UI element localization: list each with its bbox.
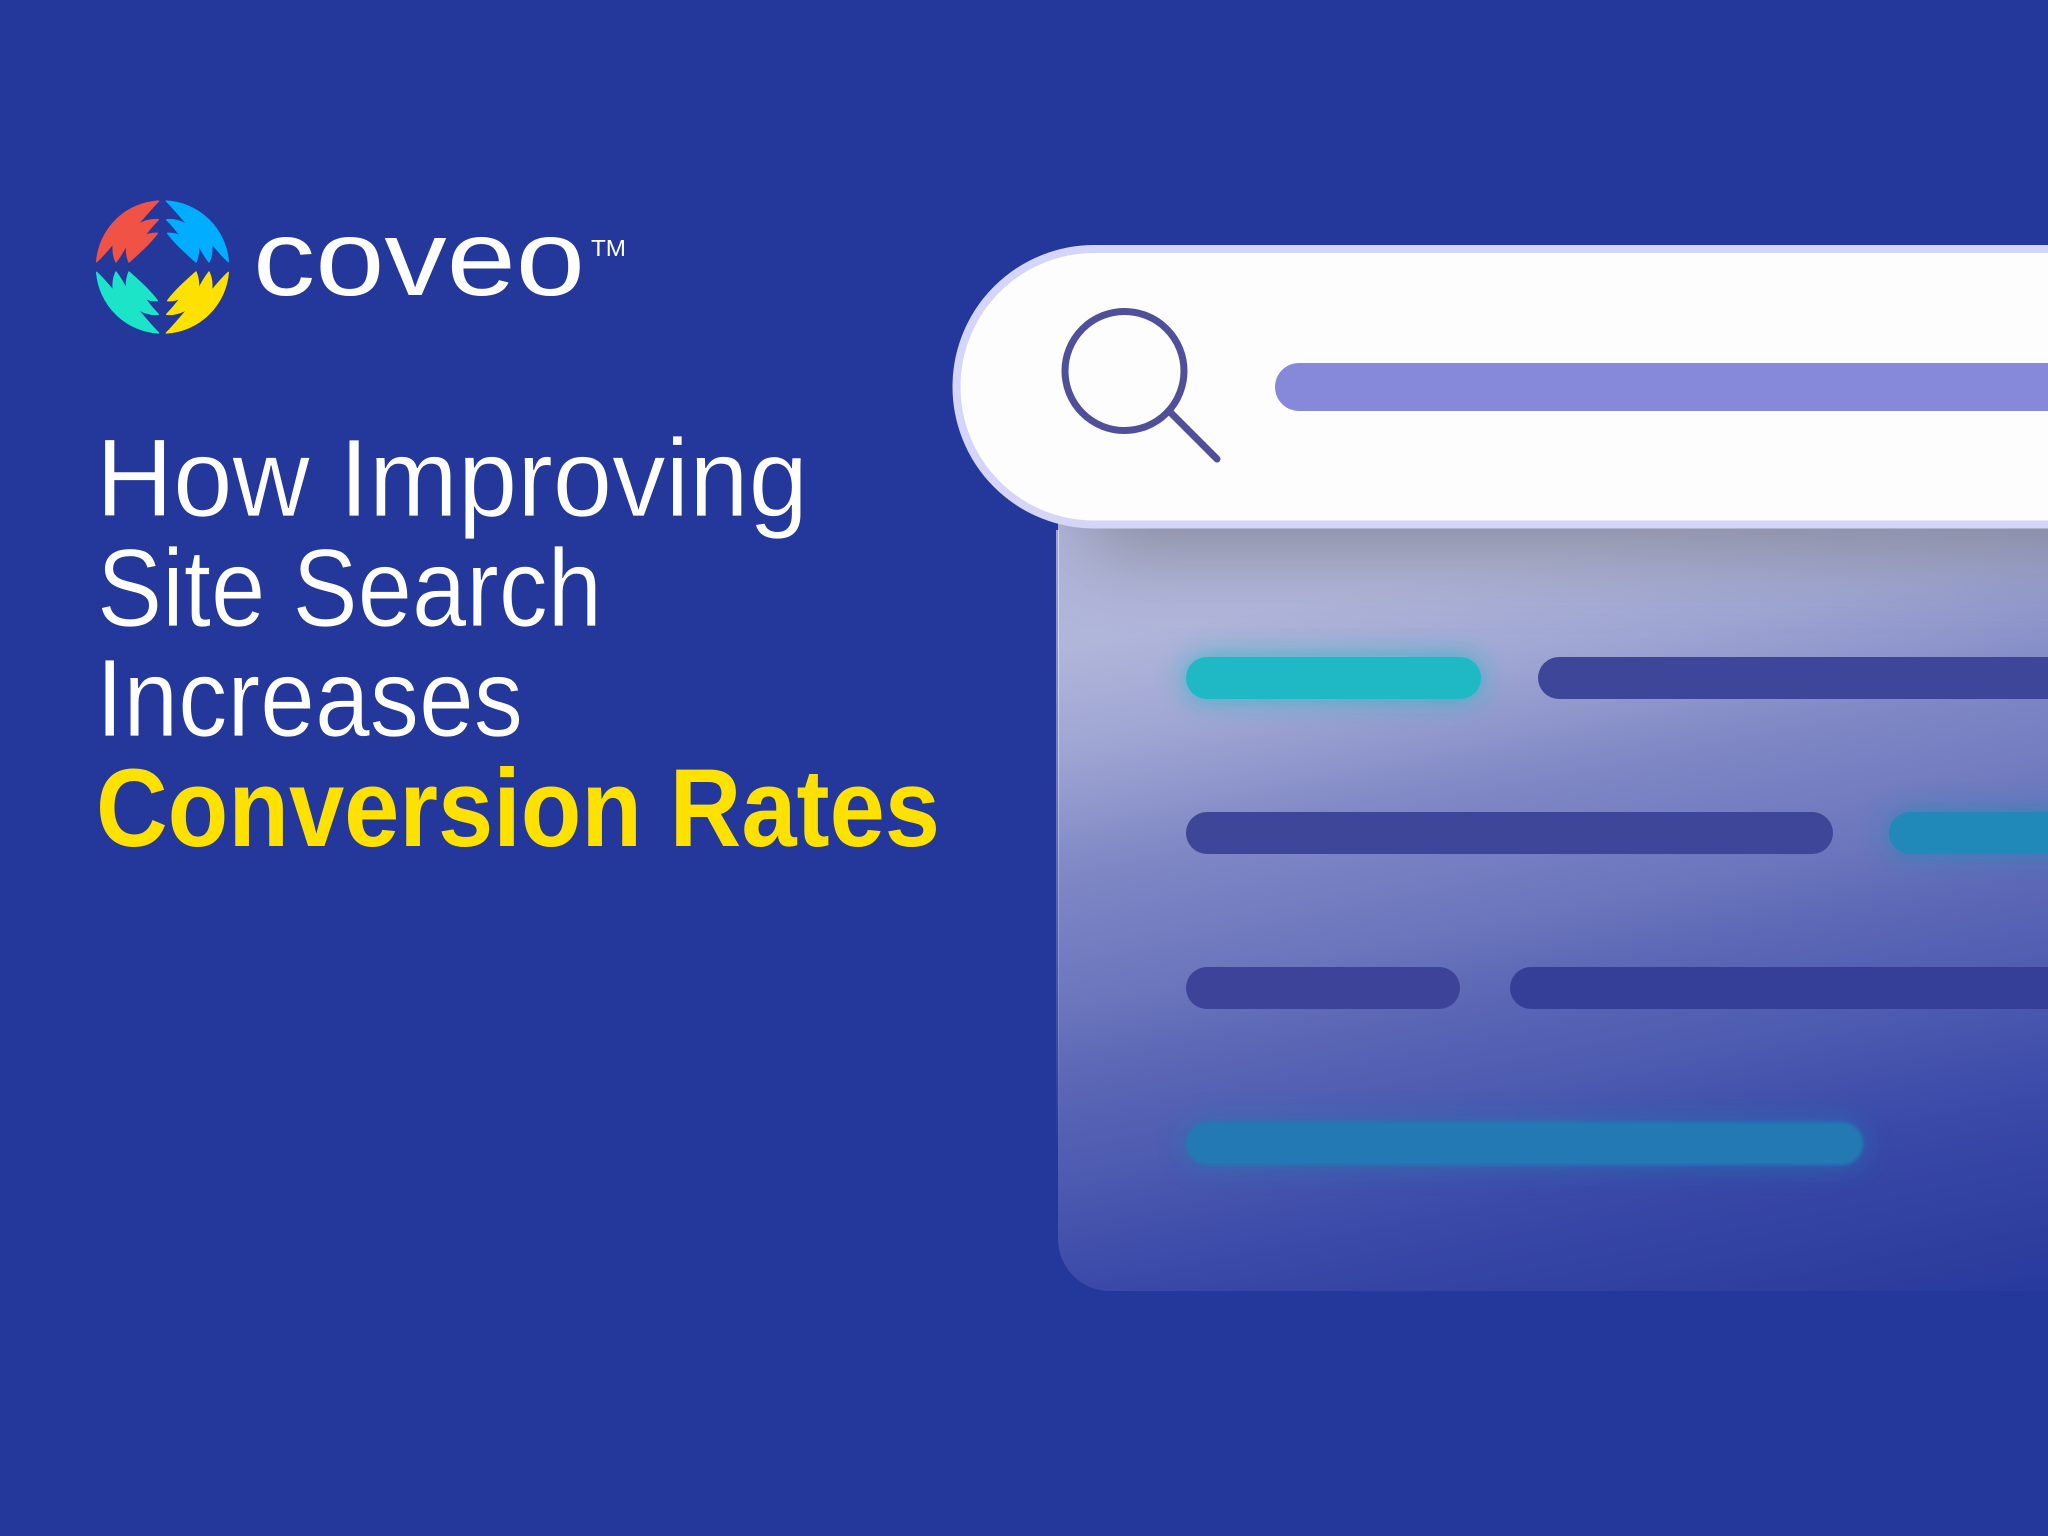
panel: search results bbox=[1056, 524, 2048, 1291]
logo wordmark: coveo bbox=[253, 197, 585, 318]
search bar shape bbox=[956, 249, 2048, 524]
panel left edge highlight bbox=[1056, 530, 1059, 1150]
title highlight: Conversion Rates: Conversion Rates bbox=[96, 747, 940, 870]
teal result bar bbox=[1889, 812, 2048, 854]
teal result bar bbox=[1186, 1122, 1863, 1165]
icon: magnifying glass bbox=[1065, 312, 1217, 459]
title line 2: Site Search bbox=[97, 527, 602, 650]
search bar bbox=[956, 249, 2048, 524]
title line 3: Increases bbox=[96, 637, 523, 760]
panel background bbox=[1058, 400, 2048, 1291]
teal glow bbox=[1887, 810, 2048, 856]
teal result bar bbox=[1186, 657, 1481, 699]
teal glow bbox=[1184, 1120, 1865, 1167]
title line 1: How Improving bbox=[96, 417, 808, 540]
title bbox=[96, 417, 940, 870]
shadow cast by search bar bbox=[1058, 524, 2048, 590]
teal glow bbox=[1184, 655, 1483, 701]
result row 1 bbox=[1184, 655, 2048, 701]
dark result bar bbox=[1510, 967, 2048, 1009]
result row 2 bbox=[1186, 810, 2048, 856]
trademark: TM bbox=[591, 235, 626, 261]
logo: coveo bbox=[97, 197, 626, 333]
dark result bar bbox=[1186, 812, 1833, 854]
search query bar bbox=[1275, 363, 2048, 411]
result row 3 bbox=[1186, 967, 2048, 1009]
result row 4 bbox=[1184, 1120, 1865, 1167]
icon: coveo four-colour mark bbox=[97, 201, 228, 333]
dark result bar bbox=[1186, 967, 1460, 1009]
dark result bar bbox=[1538, 657, 2048, 699]
